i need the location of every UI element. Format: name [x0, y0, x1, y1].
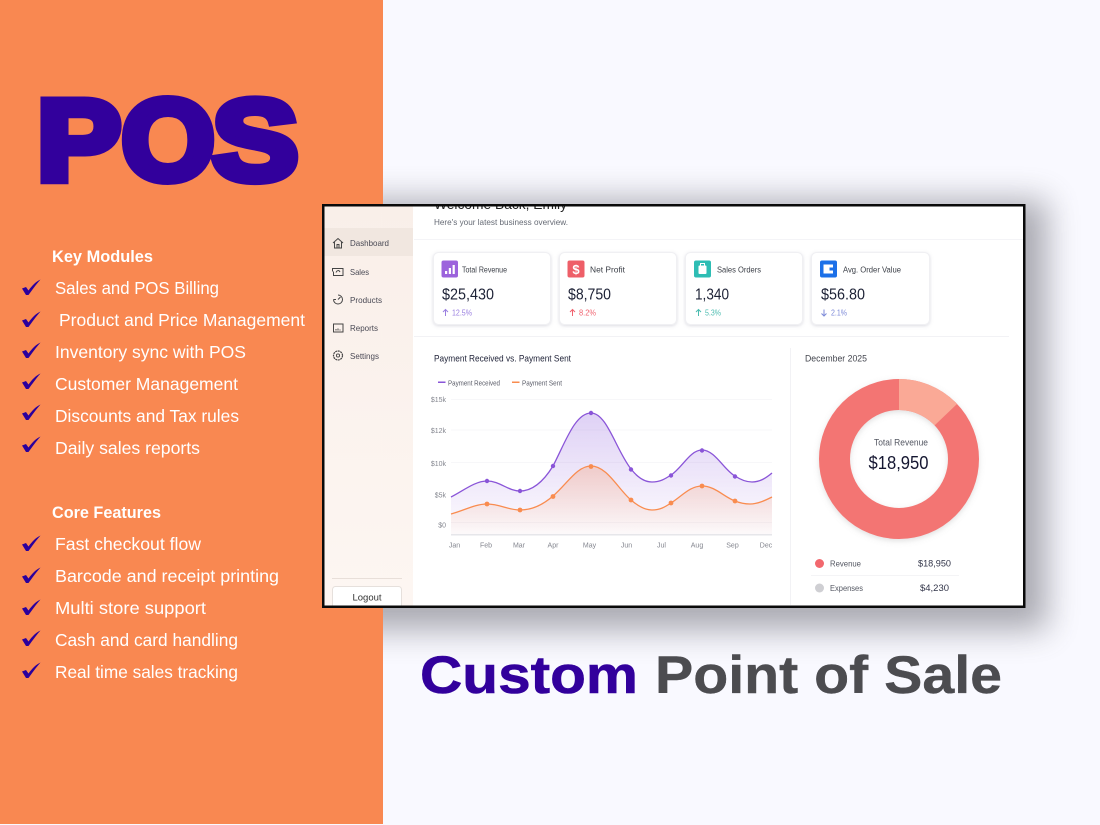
x axis labels: Aug: [691, 542, 703, 550]
icon: bag: [694, 260, 711, 278]
heading: core features: Core Features: [52, 504, 161, 522]
panel: key modules list: [22, 248, 305, 458]
card: net profit: Net Profit: [590, 266, 626, 274]
card: avg order value: 2.1%: [831, 308, 847, 318]
nav item: Reports: [350, 323, 378, 333]
x axis labels: Jan: [449, 542, 460, 550]
icon: check: [22, 630, 40, 646]
icon: check: [22, 568, 40, 583]
icon: check: [22, 280, 40, 295]
icon: check: [22, 436, 40, 452]
card: avg order value: Avg. Order Value: [843, 266, 902, 274]
area: payment sent: [451, 467, 772, 528]
chart legend: Payment Sent: [522, 380, 562, 388]
y axis labels: $15k: [431, 397, 446, 404]
list item: Multi store support: [55, 598, 206, 618]
list item: Barcode and receipt printing: [55, 566, 279, 586]
panel: dashboard screenshot: [323, 196, 1024, 616]
line chart: [431, 397, 773, 550]
list item: Inventory sync with POS: [55, 342, 246, 362]
icon: dollar: $: [572, 262, 580, 277]
screenshot drop shadow: [345, 200, 1047, 630]
title: POS: S: [212, 78, 298, 204]
icon: sales: [332, 268, 343, 276]
panel: app sidebar: [324, 206, 413, 616]
list item: Discounts and Tax rules: [55, 406, 239, 426]
icon: check: [22, 374, 40, 389]
donut legend: $4,230: [920, 583, 949, 593]
welcome subtitle: Here's your latest business overview.: [434, 217, 568, 227]
card: total revenue: [434, 252, 550, 324]
y axis labels: $0: [438, 522, 446, 530]
icon: reports: [334, 324, 343, 332]
icon: settings: [334, 351, 342, 360]
y axis labels: $5k: [435, 492, 446, 500]
list item: Daily sales reports: [55, 438, 200, 458]
icon: check: [22, 342, 40, 358]
donut legend: [811, 558, 959, 593]
donut legend: $18,950: [918, 558, 951, 568]
title: POS: [37, 78, 298, 204]
nav item: Sales: [350, 267, 369, 277]
data points: sent: [485, 464, 737, 512]
y axis labels: $12k: [431, 428, 446, 435]
headline: custom point of sale: [420, 646, 1002, 705]
icon: check: [22, 600, 40, 615]
card: net profit: $8,750: [568, 286, 611, 304]
donut chart: [834, 379, 964, 524]
list item: Product and Price Management: [59, 310, 305, 330]
icon: check: [22, 536, 40, 551]
icon: check: [22, 404, 40, 420]
button: logout: Logout: [352, 592, 382, 604]
nav item: Products: [350, 295, 382, 305]
x axis labels: Jun: [621, 542, 632, 550]
card: total revenue: 12.5%: [452, 308, 472, 318]
x axis labels: May: [583, 542, 597, 550]
list item: Cash and card handling: [55, 630, 238, 650]
icon: check: [22, 312, 40, 327]
card: avg order value: $56.80: [821, 286, 865, 304]
icon: bars: [442, 260, 458, 278]
heading: key modules: Key Modules: [52, 248, 153, 266]
panel: core features list: [22, 504, 279, 682]
card: net profit: [560, 252, 676, 324]
line: payment received: [451, 413, 772, 497]
headline: custom point of sale: Custom: [420, 646, 638, 705]
y axis labels: $10k: [431, 461, 446, 468]
card: total revenue: $25,430: [442, 286, 494, 304]
list item: Sales and POS Billing: [55, 278, 219, 298]
donut heading: December 2025: [805, 354, 867, 364]
chart legend: Payment Received: [448, 380, 500, 388]
list item: Customer Management: [55, 374, 238, 394]
donut legend: Expenses: [830, 584, 863, 593]
arrow up: [696, 310, 701, 316]
card: sales orders: Sales Orders: [717, 266, 761, 274]
nav item: Settings: [350, 351, 379, 361]
nav item: Dashboard: [350, 238, 389, 248]
card: sales orders: [686, 252, 802, 324]
button: logout: [332, 586, 402, 606]
card: sales orders: 1,340: [695, 286, 729, 304]
data points: received: [485, 411, 737, 493]
welcome heading: Welcome Back, Emily: [434, 196, 567, 212]
chart legend: [438, 380, 562, 388]
area: payment received: [451, 414, 772, 520]
title: POS: P: [37, 78, 121, 204]
x axis labels: Apr: [548, 542, 559, 550]
donut legend: Revenue: [830, 560, 862, 568]
x axis labels: Sep: [726, 542, 739, 550]
icon: home: [333, 238, 343, 248]
arrow up: [443, 310, 448, 316]
x axis labels: Jul: [657, 542, 666, 550]
y axis labels: [431, 397, 446, 530]
list item: Fast checkout flow: [55, 534, 201, 554]
chart heading: Payment Received vs. Payment Sent: [434, 354, 571, 364]
list item: Real time sales tracking: [55, 662, 238, 682]
icon: products: [334, 295, 342, 304]
card: net profit: 8.2%: [579, 308, 596, 318]
donut label: Total Revenue: [874, 438, 928, 448]
icon: wallet: [820, 260, 837, 278]
x axis labels: Feb: [480, 542, 492, 550]
x axis labels: Mar: [513, 542, 526, 550]
x axis labels: Dec: [760, 542, 773, 550]
card: sales orders: 5.3%: [705, 308, 721, 318]
x axis labels: [449, 542, 773, 550]
icon: check: [22, 662, 40, 678]
donut value: $18,950: [868, 453, 928, 473]
card: avg order value: [812, 252, 930, 324]
headline: custom point of sale: Point of Sale: [655, 646, 1002, 705]
title: POS: O: [122, 78, 215, 204]
arrow down: [822, 310, 826, 316]
arrow up: [570, 310, 575, 316]
panel: orange sidebar: [0, 0, 383, 824]
line: payment sent: [451, 466, 772, 514]
card: total revenue: Total Revenue: [462, 266, 507, 274]
